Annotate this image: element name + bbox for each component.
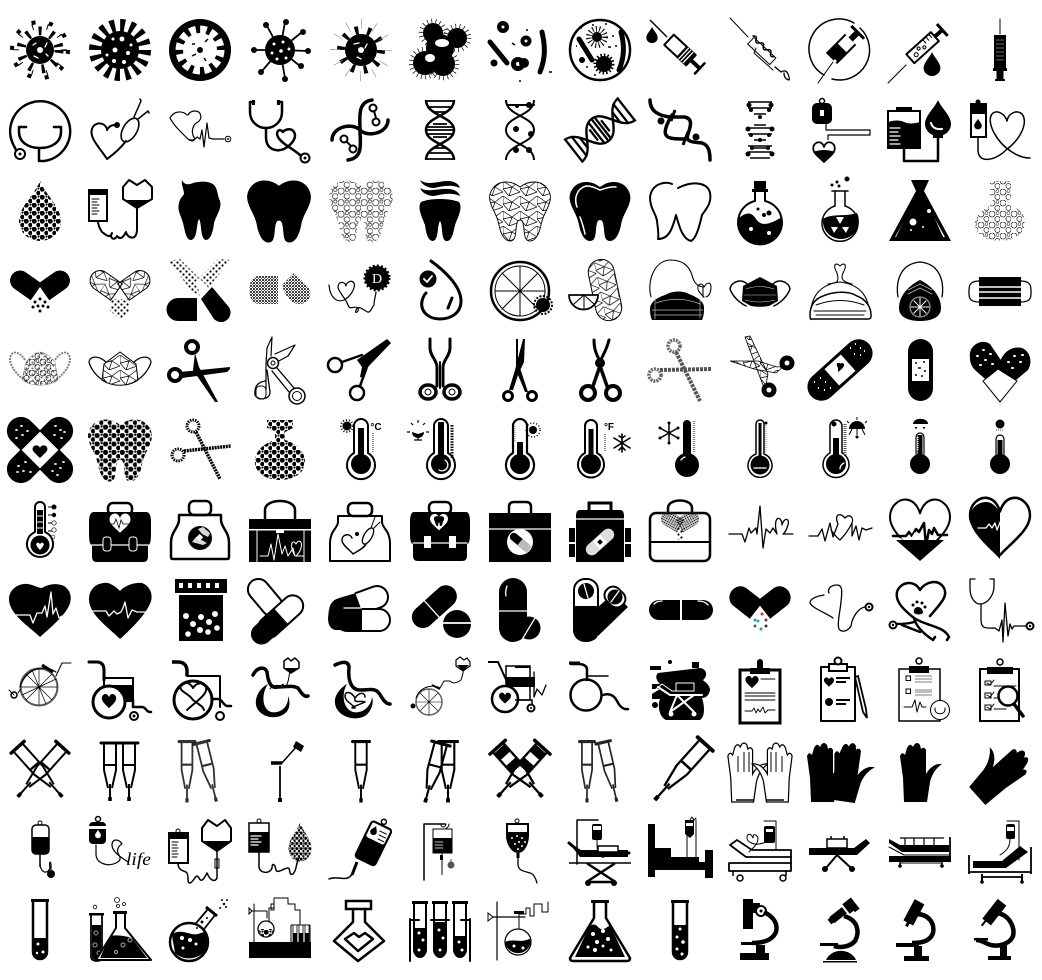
icon: scattered bacteria [490, 21, 552, 81]
icon: wheelchair with heart [89, 662, 151, 720]
icon: DNA helix [425, 100, 455, 160]
icon: bubble tooth [329, 181, 393, 242]
icon: virus with ball-tipped spokes [251, 19, 311, 82]
icon: black case with heartbeat [249, 501, 311, 562]
icon: conical flask with bubbles [570, 900, 630, 961]
icon: three test tubes in rack [410, 901, 470, 961]
icon: black medical bag with heart [89, 503, 151, 562]
icon: black tooth with white inline [570, 182, 630, 241]
icon: thin heart stethoscope [810, 585, 872, 631]
icon: crossed crutches [11, 741, 69, 803]
icon: capsule and tablet [407, 581, 471, 638]
icon: DNA loop with dots [650, 100, 710, 160]
icon: surgical mask [969, 277, 1031, 306]
icon: IV bag with small bubble drop [32, 821, 55, 878]
icon: stethoscope with heartbeat [970, 579, 1034, 642]
icon: vertical syringe [993, 19, 1007, 81]
icon: syringe inside circle [809, 19, 870, 83]
icon: forearm crutch [271, 741, 304, 802]
icon: retort stand with flask [488, 902, 548, 960]
icon: IV bag with bubble drop [249, 819, 312, 874]
icon: syringe with drop [646, 20, 705, 74]
icon: dissolving capsule [166, 259, 231, 322]
icon: outline scissors [255, 337, 305, 404]
icon: black gloves [807, 741, 878, 805]
icon: bandage cross [0, 392, 98, 508]
icon: syringe with bubbles and drop [888, 24, 948, 83]
icon: microscope 4 [974, 899, 1013, 960]
icon: reclining bed with heart IV [729, 821, 791, 881]
icon: pill bottle [175, 579, 227, 641]
icon: diagonal bandage [802, 333, 878, 407]
icon: heart stethoscope [91, 99, 149, 159]
icon: open capsule with colored dots [725, 582, 795, 630]
icon: test tube [31, 899, 49, 959]
icon: outline gloves [728, 743, 792, 802]
icon: microscope 3 [896, 899, 933, 961]
icon: flat hospital bed with rails [889, 837, 951, 868]
icon: hospital bed with IV and rails [969, 821, 1031, 884]
icon: radiation flask [822, 176, 859, 241]
icon: stretcher with IV [569, 820, 631, 886]
icon: drop with check [420, 261, 461, 319]
icon: abstract wheelchair with heart [335, 662, 390, 718]
icon: black bubble flask [255, 420, 305, 480]
icon: round flask tilted [170, 899, 228, 961]
icon: diagonal single crutch [647, 737, 713, 807]
icon: white virus on black disc [169, 19, 231, 81]
icon: round black virus [96, 26, 144, 74]
icon: low-poly tooth [490, 182, 550, 241]
icon: microscope 2 [820, 898, 860, 962]
icon: thin tilted crutches [179, 740, 224, 804]
icon: vertical capsule with tablet [499, 578, 540, 642]
icon: microscope 1 [740, 899, 776, 960]
icon: thermometer with sun [407, 419, 455, 479]
icon: low-poly capsule [86, 267, 154, 319]
icon: heart capsule [970, 342, 1030, 402]
icon: ladder DNA [746, 102, 774, 158]
icon: heart line with vitamin D: D [372, 272, 382, 287]
icon: black heart heartbeat [9, 584, 71, 637]
icon: crossed capsules [244, 575, 307, 649]
icon: heart thermometer [27, 502, 56, 557]
icon: blood bag and drop [888, 100, 951, 161]
icon: thermometer with snowflake [658, 420, 699, 477]
icon: diagonal forceps [328, 339, 391, 400]
icon: clipboard with pencil [821, 658, 867, 721]
icon: IV bag to heart [812, 98, 870, 162]
icon: thermometer fahrenheit with snowflake: °F [604, 422, 614, 433]
icon: narrow tooth with swish [178, 180, 220, 240]
icon: heart with heartbeat and black base [890, 500, 950, 561]
icon: diagonal DNA [564, 97, 636, 163]
icon: clipboard with stethoscope [899, 658, 950, 721]
icon: black bubble tooth [88, 420, 152, 482]
icon: bubble mask [10, 352, 70, 385]
icon: horizontal capsule [649, 600, 713, 620]
icon: thin spoke wheelchair [9, 663, 71, 706]
icon: textured scissors [649, 340, 711, 401]
icon: low-poly scissors [730, 336, 794, 398]
icon: stethoscope with heart loop [250, 100, 310, 162]
icon: low-poly mask [89, 352, 151, 385]
icon: abstract wheelchair with IV heart [253, 658, 308, 717]
icon: tilted black glove [959, 732, 1036, 808]
icon: broken capsule [6, 267, 74, 312]
icon: simple thermometer [748, 420, 772, 477]
icon: minimal wheelchair [569, 663, 628, 710]
icon: test tube with dots [671, 900, 689, 959]
icon: hairy bacteria [411, 21, 469, 78]
icon: black molar [247, 181, 311, 242]
icon: citrus slice and low-poly capsule [569, 257, 624, 323]
icon: thermometer with ball [990, 420, 1010, 474]
icon: thermometer celsius [341, 419, 382, 479]
icon: wheelchair with heart ribbon [172, 662, 231, 720]
icon: beaded scissors [172, 420, 231, 479]
icon: thick crossed crutches [490, 740, 550, 804]
icon: half black heart [970, 498, 1030, 559]
icon: IV pole [424, 824, 454, 880]
icon: capsules with round pills [574, 579, 629, 641]
icon: IV bag and heart line [971, 100, 1030, 159]
icon: pair of crutches [101, 743, 138, 801]
icon: bubble flask [975, 181, 1025, 241]
icon: black glove [900, 743, 942, 802]
icon: stethoscope with paw [890, 582, 949, 640]
icon: DNA helix with dots [506, 100, 534, 160]
icon: geometric flask [334, 901, 384, 961]
icon: tooth with toothpaste stripes [420, 180, 460, 241]
icon: two capsules [327, 583, 391, 631]
icon: citrus with bacteria [491, 262, 552, 320]
icon: triangle flask [889, 180, 951, 241]
icon: spiky virus with heart tips [12, 22, 68, 78]
icon: black bag with tooth [410, 502, 470, 561]
icon: speckled capsule [249, 273, 310, 304]
icon: case with bandage [569, 503, 631, 562]
icon: outline bag with capsule [650, 500, 710, 561]
icon: petri dish [570, 20, 630, 80]
icon: thermometer with cloud [910, 419, 930, 474]
icon: heartbeat through heart [809, 515, 872, 541]
icon: respirator [897, 262, 943, 321]
icon: round flask with cork [738, 181, 783, 244]
icon: lab apparatus [249, 898, 311, 958]
icon: single crutch [352, 742, 370, 802]
icon: vertical forceps [420, 339, 460, 399]
icon: IV bag with bubbles and tube [506, 819, 537, 883]
icon: drop of bubbles [19, 181, 61, 241]
icon: thin stethoscope heartbeat [170, 111, 231, 147]
icon: white doctor bag with bandage [171, 501, 229, 559]
icon: black case with capsule [489, 502, 551, 562]
icon: black heart heartbeat 2 [89, 583, 152, 639]
icon: thin syringe with squiggle [730, 18, 789, 80]
icon: heartbeat with heart [729, 506, 793, 548]
icon: clipboard with heart [740, 659, 780, 723]
icon: thermometer fahrenheit with snowflake [578, 420, 630, 478]
icon: black scissors [169, 341, 230, 402]
icon: IV bag and heart bag tube [169, 820, 231, 883]
icon: IV bag to heart bag [89, 180, 152, 239]
icon: thin crutches 2 [579, 741, 624, 803]
icon: DNA strand with nodes [332, 100, 388, 160]
icon: IV bag with life script: life [126, 849, 151, 869]
icon: abstract stretcher blob [650, 660, 710, 720]
icon: thermometer with half sun [506, 419, 540, 479]
icon: leaning crutches [416, 741, 457, 805]
icon: stethoscope smiley [10, 101, 70, 161]
icon: wheelchair with black panel [488, 662, 546, 712]
icon: thermometer celsius: °C [370, 422, 382, 433]
icon: pliers [581, 340, 620, 400]
icon: clipboard with magnifier [980, 659, 1023, 721]
icon: thermometer with frost sun [823, 417, 867, 478]
icon: outline tooth [650, 183, 710, 241]
icon: spiky cell [335, 24, 387, 76]
icon: white face mask with heart [810, 264, 871, 319]
icon: tilted IV bag [329, 814, 396, 879]
icon: outline bag with stethoscope heart [330, 503, 390, 561]
icon: face mask with heart string [650, 260, 711, 320]
icon: heart line with vitamin D [329, 266, 389, 312]
icon: vertical bandage [908, 339, 933, 401]
icon: black hospital bed [648, 817, 713, 878]
icon: gurney [809, 836, 870, 872]
icon: narrow tweezers scissors [504, 339, 536, 400]
icon: thin wheelchair with IV heart [410, 657, 470, 715]
icon: test tube and conical flask [89, 898, 151, 961]
icon: black face mask [730, 277, 790, 307]
icon: IV bag with life script [89, 816, 151, 869]
